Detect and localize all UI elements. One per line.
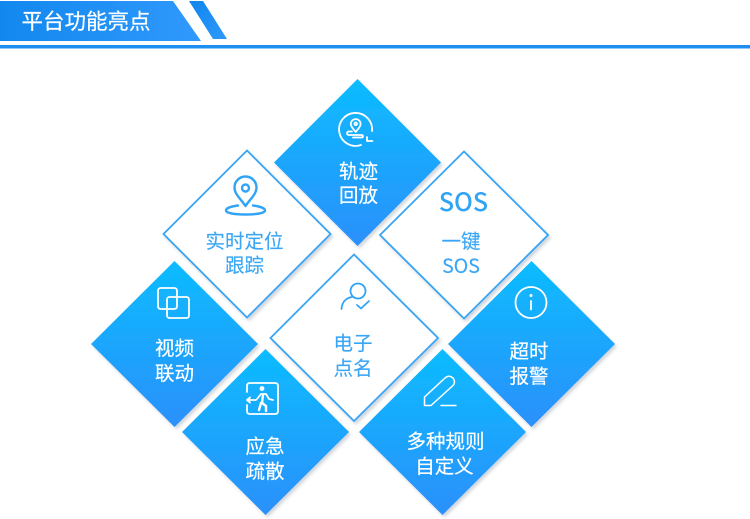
label: 一键 — [441, 231, 481, 253]
label: 自定义 — [415, 456, 474, 478]
panel: 视频联动 — [91, 261, 258, 427]
icon: info circle — [516, 287, 546, 318]
label: 跟踪 — [225, 255, 264, 277]
label: 轨迹 — [339, 161, 378, 183]
icon: person with check — [342, 284, 369, 309]
panel: 应急疏散 — [182, 349, 349, 515]
panel: 超时报警 — [448, 261, 615, 427]
panel: 一键SOS — [380, 152, 548, 318]
panel: 实时定位跟踪 — [164, 150, 330, 318]
label — [509, 341, 549, 388]
icon: location pin — [226, 177, 265, 214]
label: 回放 — [339, 185, 378, 207]
label: 多种规则 — [406, 431, 485, 453]
header banner — [0, 1, 750, 48]
label — [339, 161, 378, 207]
label: 电子 — [333, 333, 373, 355]
label: 联动 — [155, 363, 194, 385]
icon: emergency exit — [247, 383, 278, 414]
icon: pen — [424, 376, 456, 406]
label — [441, 231, 481, 279]
label: 视频 — [155, 338, 194, 360]
label: SOS — [442, 250, 480, 279]
label: 疏散 — [245, 461, 285, 483]
label — [205, 231, 284, 277]
label: 点名 — [333, 358, 373, 380]
icon: SOS: SOS — [439, 183, 488, 219]
label — [333, 333, 373, 380]
panel: 轨迹回放 — [274, 79, 441, 246]
label — [245, 436, 285, 483]
label: 超时 — [509, 341, 549, 363]
panel: 电子点名 — [270, 254, 438, 421]
label: 实时定位 — [205, 231, 284, 253]
icon: track playback — [339, 113, 372, 146]
label: 报警 — [509, 366, 549, 388]
label — [155, 338, 194, 385]
icon: overlapping squares — [158, 288, 189, 318]
label — [406, 431, 485, 478]
label: 应急 — [245, 436, 285, 458]
panel: 多种规则自定义 — [359, 349, 526, 515]
title: 平台功能亮点 — [21, 10, 151, 34]
